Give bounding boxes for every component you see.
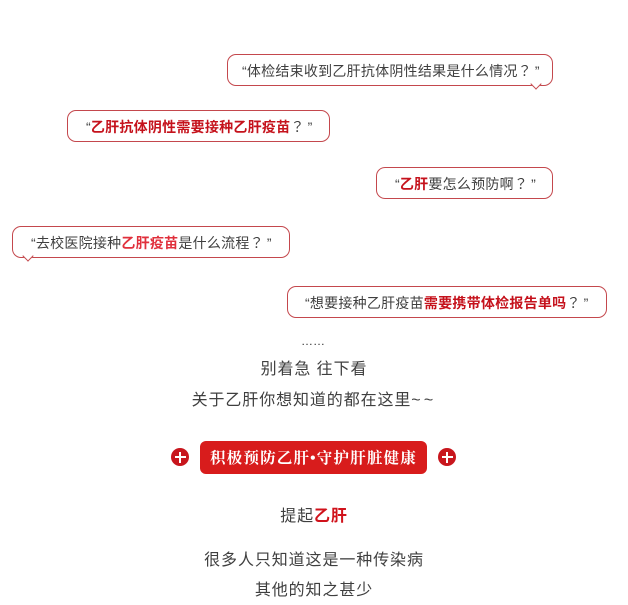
speech bubble: vaccination process: “去校医院接种乙肝疫苗是什么流程？”: [31, 233, 272, 253]
icon: left plus: [171, 448, 189, 466]
speech bubble: how to prevent: “乙肝要怎么预防啊？”: [395, 174, 536, 194]
speech bubble: how to prevent: [376, 167, 553, 199]
speech bubble: need vaccine: [67, 110, 330, 142]
speech bubble: antibody negative result: “体检结束收到乙肝抗体阴性结果是什么情况？”: [242, 61, 540, 81]
text: many people only know: 很多人只知道这是一种传染病: [204, 552, 424, 569]
speech bubble: report needed: [287, 286, 607, 318]
text: know little else: 其他的知之甚少: [255, 582, 373, 599]
text: everything about hepatitis B: 关于乙肝你想知道的都在这里~~: [192, 392, 436, 409]
text: don't worry: 别着急 往下看: [261, 361, 367, 378]
text: ellipsis: ……: [301, 334, 325, 348]
heading banner: [200, 441, 427, 474]
icon: right plus: [438, 448, 456, 466]
speech bubble: need vaccine: “乙肝抗体阴性需要接种乙肝疫苗？”: [86, 117, 313, 137]
heading banner: 积极预防乙肝•守护肝脏健康: [210, 450, 417, 467]
speech bubble: antibody negative result: [227, 54, 553, 86]
speech bubble: vaccination process: [12, 226, 290, 258]
speech bubble: report needed: “想要接种乙肝疫苗需要携带体检报告单吗？”: [305, 293, 589, 313]
text: speaking of hepatitis B: 提起乙肝: [280, 508, 348, 525]
